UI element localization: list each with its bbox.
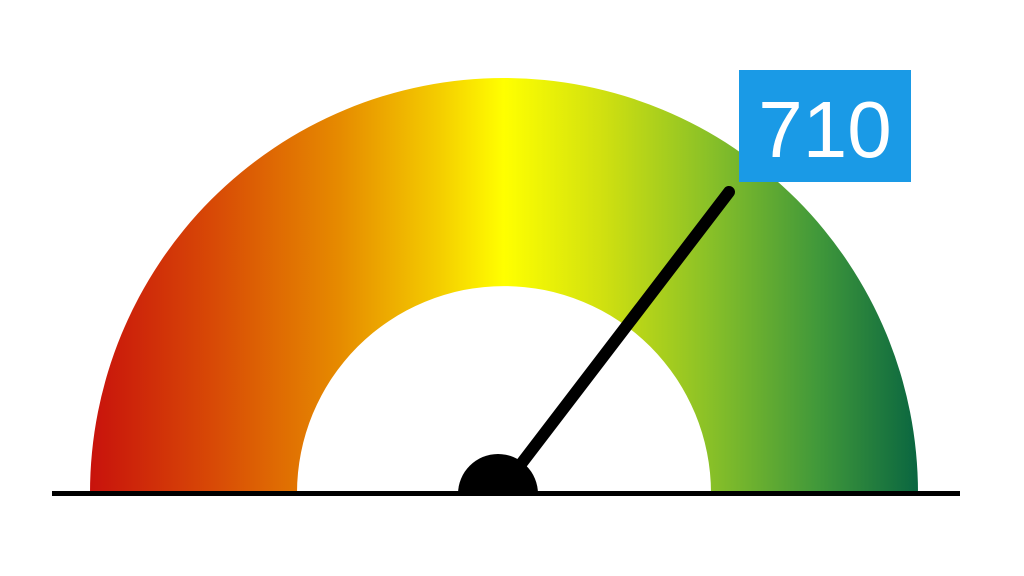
needle hub: [458, 454, 538, 494]
gauge arc: [90, 78, 918, 493]
baseline: [52, 491, 960, 496]
value label: 710: [758, 85, 892, 174]
value label: [739, 70, 911, 182]
needle: [505, 192, 729, 485]
